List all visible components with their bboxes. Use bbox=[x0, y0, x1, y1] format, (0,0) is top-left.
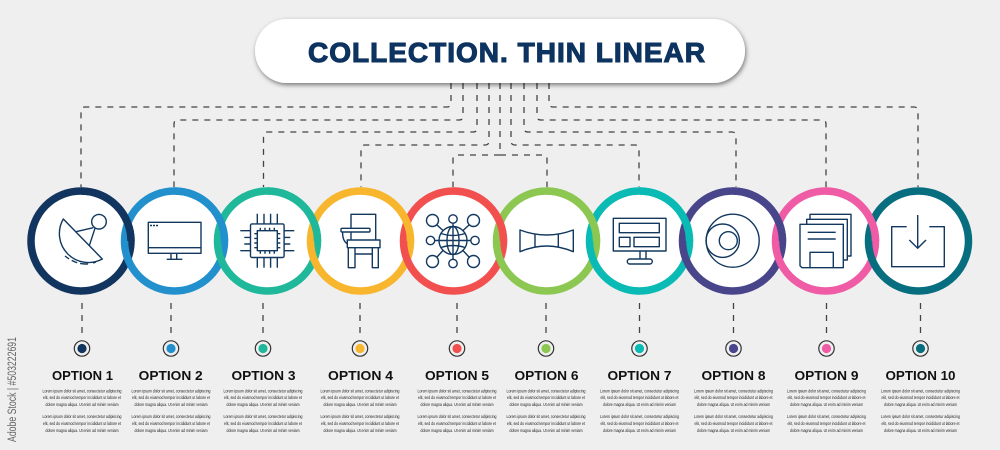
description: option 6: dolore magna aliqua. Ut enim ad minim veniam bbox=[510, 428, 583, 433]
option 6 bbox=[496, 191, 596, 433]
icon: desktop monitor bbox=[148, 222, 201, 259]
description: option 9: elit, sed do eiusmod tempor incididunt ut labore et bbox=[788, 395, 866, 400]
option 9 bbox=[776, 191, 876, 433]
description: option 2: dolore magna aliqua. Ut enim ad minim veniam bbox=[134, 428, 208, 433]
description: option 10: Lorem ipsum dolor sit amet, consectetur adipiscing bbox=[881, 388, 961, 393]
label: option 10: OPTION 10 bbox=[886, 369, 956, 383]
description: option 7: Lorem ipsum dolor sit amet, consectetur adipiscing bbox=[600, 388, 680, 393]
white circle discs bbox=[31, 191, 968, 291]
description: option 4: dolore magna aliqua. Ut enim ad minim veniam bbox=[324, 402, 397, 407]
description: option 6: Lorem ipsum dolor sit amet, consectetur adipiscing bbox=[506, 388, 586, 393]
description: option 1: dolore magna aliqua. Ut enim ad minim veniam bbox=[46, 428, 119, 433]
description: option 4 bbox=[320, 388, 400, 433]
description: option 7: dolore magna aliqua. Ut enim ad minim veniam bbox=[603, 402, 676, 407]
icon: stacked floppy files bbox=[800, 214, 851, 268]
label: option 8: OPTION 8 bbox=[702, 369, 766, 383]
description: option 7 bbox=[600, 388, 680, 433]
icon: global network bbox=[426, 214, 480, 268]
description: option 7: elit, sed do eiusmod tempor incididunt ut labore et bbox=[600, 395, 679, 400]
description: option 4: Lorem ipsum dolor sit amet, consectetur adipiscing bbox=[320, 388, 400, 393]
description: option 1: elit, sed do eiusmod tempor incididunt ut labore et bbox=[43, 421, 122, 426]
option 4 bbox=[310, 191, 410, 433]
description: option 3: Lorem ipsum dolor sit amet, consectetur adipiscing bbox=[224, 414, 303, 419]
description: option 3: elit, sed do eiusmod tempor incididunt ut labore et bbox=[224, 421, 303, 426]
description: option 5: Lorem ipsum dolor sit amet, consectetur adipiscing bbox=[418, 414, 497, 419]
description: option 1: elit, sed do eiusmod tempor incididunt ut labore et bbox=[43, 395, 122, 400]
description: option 6: Lorem ipsum dolor sit amet, consectetur adipiscing bbox=[506, 414, 586, 419]
description: option 1: Lorem ipsum dolor sit amet, consectetur adipiscing bbox=[42, 414, 122, 419]
description: option 3: dolore magna aliqua. Ut enim ad minim veniam bbox=[226, 402, 300, 407]
description: option 9 bbox=[787, 388, 867, 433]
description: option 3: elit, sed do eiusmod tempor incididunt ut labore et bbox=[224, 395, 303, 400]
description: option 5: dolore magna aliqua. Ut enim ad minim veniam bbox=[420, 402, 494, 407]
description: option 6: dolore magna aliqua. Ut enim ad minim veniam bbox=[510, 402, 583, 407]
label: option 5: OPTION 5 bbox=[425, 369, 489, 383]
option 7 bbox=[590, 191, 690, 433]
description: option 2: Lorem ipsum dolor sit amet, consectetur adipiscing bbox=[132, 414, 211, 419]
description: option 7: Lorem ipsum dolor sit amet, consectetur adipiscing bbox=[600, 414, 680, 419]
icon: nested circles bbox=[706, 214, 759, 267]
label: option 3: OPTION 3 bbox=[232, 369, 296, 383]
description: option 8 bbox=[694, 388, 774, 433]
description: option 4: Lorem ipsum dolor sit amet, consectetur adipiscing bbox=[320, 414, 400, 419]
description: option 6: elit, sed do eiusmod tempor incididunt ut labore et bbox=[507, 395, 586, 400]
description: option 2: Lorem ipsum dolor sit amet, consectetur adipiscing bbox=[132, 388, 211, 393]
description: option 8: Lorem ipsum dolor sit amet, consectetur adipiscing bbox=[694, 388, 774, 393]
description: option 5: Lorem ipsum dolor sit amet, consectetur adipiscing bbox=[418, 388, 497, 393]
description: option 10 bbox=[881, 388, 961, 433]
label: option 2: OPTION 2 bbox=[139, 369, 203, 383]
description: option 4: elit, sed do eiusmod tempor incididunt ut labore et bbox=[321, 395, 400, 400]
description: option 7: elit, sed do eiusmod tempor incididunt ut labore et bbox=[600, 421, 679, 426]
description: option 10: elit, sed do eiusmod tempor incididunt ut labore et bbox=[882, 395, 960, 400]
description: option 9: dolore magna aliqua. Ut enim ad minim veniam bbox=[790, 428, 863, 433]
icon: microchip bbox=[240, 214, 294, 268]
description: option 2: dolore magna aliqua. Ut enim ad minim veniam bbox=[134, 402, 208, 407]
description: option 3: dolore magna aliqua. Ut enim ad minim veniam bbox=[226, 428, 300, 433]
description: option 1: Lorem ipsum dolor sit amet, consectetur adipiscing bbox=[42, 388, 122, 393]
description: option 8: dolore magna aliqua. Ut enim ad minim veniam bbox=[697, 428, 770, 433]
option 2 bbox=[124, 191, 224, 433]
ring interlace overlays bbox=[81, 191, 876, 241]
description: option 10: dolore magna aliqua. Ut enim ad minim veniam bbox=[884, 402, 957, 407]
description: option 2: elit, sed do eiusmod tempor incididunt ut labore et bbox=[132, 421, 211, 426]
description: option 2 bbox=[132, 388, 211, 433]
description: option 1: dolore magna aliqua. Ut enim ad minim veniam bbox=[46, 402, 119, 407]
description: option 7: dolore magna aliqua. Ut enim ad minim veniam bbox=[603, 428, 676, 433]
stock id vertical text: Adobe Stock | #503222691 bbox=[7, 337, 19, 442]
label: option 4: OPTION 4 bbox=[328, 369, 393, 383]
description: option 9: elit, sed do eiusmod tempor incididunt ut labore et bbox=[788, 421, 866, 426]
description: option 5: elit, sed do eiusmod tempor incididunt ut labore et bbox=[418, 395, 497, 400]
description: option 8: elit, sed do eiusmod tempor incididunt ut labore et bbox=[694, 421, 773, 426]
label: option 6: OPTION 6 bbox=[514, 369, 579, 383]
description: option 9: Lorem ipsum dolor sit amet, consectetur adipiscing bbox=[787, 388, 867, 393]
description: option 5: elit, sed do eiusmod tempor incididunt ut labore et bbox=[418, 421, 497, 426]
option 3 bbox=[218, 191, 318, 433]
label: option 9: OPTION 9 bbox=[794, 369, 859, 383]
title pill: COLLECTION. THIN LINEAR bbox=[308, 37, 705, 68]
option 1 bbox=[31, 191, 131, 433]
icon: satellite dish bbox=[59, 214, 106, 264]
description: option 6 bbox=[506, 388, 586, 433]
description: option 4: elit, sed do eiusmod tempor incididunt ut labore et bbox=[321, 421, 400, 426]
description: option 1 bbox=[42, 388, 122, 433]
description: option 8: elit, sed do eiusmod tempor incididunt ut labore et bbox=[694, 395, 773, 400]
description: option 10: elit, sed do eiusmod tempor incididunt ut labore et bbox=[882, 421, 960, 426]
description: option 4: dolore magna aliqua. Ut enim ad minim veniam bbox=[324, 428, 397, 433]
icon: school desk chair bbox=[341, 214, 380, 268]
icon: download to tray bbox=[892, 215, 944, 267]
label: option 1: OPTION 1 bbox=[52, 369, 113, 383]
label: option 7: OPTION 7 bbox=[608, 369, 672, 383]
description: option 9: dolore magna aliqua. Ut enim ad minim veniam bbox=[790, 402, 863, 407]
description: option 6: elit, sed do eiusmod tempor incididunt ut labore et bbox=[507, 421, 586, 426]
description: option 10: dolore magna aliqua. Ut enim ad minim veniam bbox=[884, 428, 957, 433]
description: option 3 bbox=[224, 388, 303, 433]
description: option 9: Lorem ipsum dolor sit amet, consectetur adipiscing bbox=[787, 414, 867, 419]
option 5 bbox=[404, 191, 504, 433]
description: option 5 bbox=[418, 388, 497, 433]
description: option 5: dolore magna aliqua. Ut enim ad minim veniam bbox=[420, 428, 494, 433]
option 8 bbox=[682, 191, 782, 433]
dashed connectors from title to options bbox=[81, 83, 918, 187]
description: option 10: Lorem ipsum dolor sit amet, consectetur adipiscing bbox=[881, 414, 961, 419]
description: option 8: dolore magna aliqua. Ut enim ad minim veniam bbox=[697, 402, 770, 407]
option 10 bbox=[868, 191, 968, 433]
icon: curved screens bbox=[520, 230, 573, 252]
description: option 2: elit, sed do eiusmod tempor incididunt ut labore et bbox=[132, 395, 211, 400]
title pill bbox=[255, 19, 745, 83]
description: option 8: Lorem ipsum dolor sit amet, consectetur adipiscing bbox=[694, 414, 774, 419]
icon: web layout monitor bbox=[613, 218, 666, 264]
description: option 3: Lorem ipsum dolor sit amet, consectetur adipiscing bbox=[224, 388, 303, 393]
